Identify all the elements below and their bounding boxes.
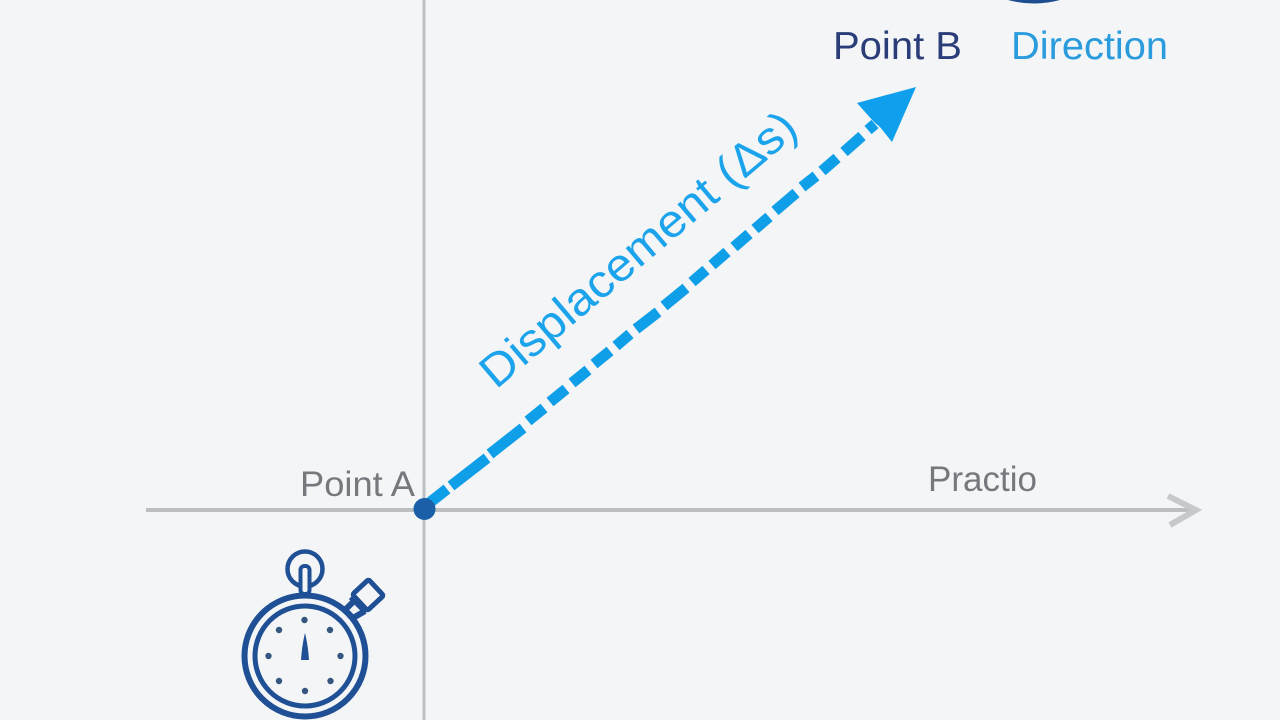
label: Direction: Direction — [1011, 25, 1168, 68]
dashed arrow shaft — [428, 124, 875, 504]
horizontal axis with arrow — [146, 496, 1196, 525]
stopwatch body — [244, 596, 366, 716]
stopwatch side button — [345, 579, 384, 618]
vertical axis — [422, 0, 426, 720]
label: Displacement (Δs): Displacement (Δs) — [469, 100, 807, 398]
displacement arrow — [428, 87, 916, 504]
label: Point A: Point A — [300, 465, 416, 504]
stopwatch hand — [301, 633, 309, 660]
stopwatch tick marks — [265, 617, 344, 694]
stopwatch dial — [255, 606, 355, 706]
arrow head — [857, 87, 916, 142]
label: Point B: Point B — [833, 25, 962, 68]
label: Practio: Practio — [928, 460, 1037, 499]
stopwatch stem — [300, 566, 310, 594]
icon: partial circle at top edge — [1008, 0, 1060, 4]
point A marker — [414, 498, 436, 520]
stopwatch crown ring — [288, 552, 322, 586]
icon: stopwatch — [244, 552, 384, 716]
